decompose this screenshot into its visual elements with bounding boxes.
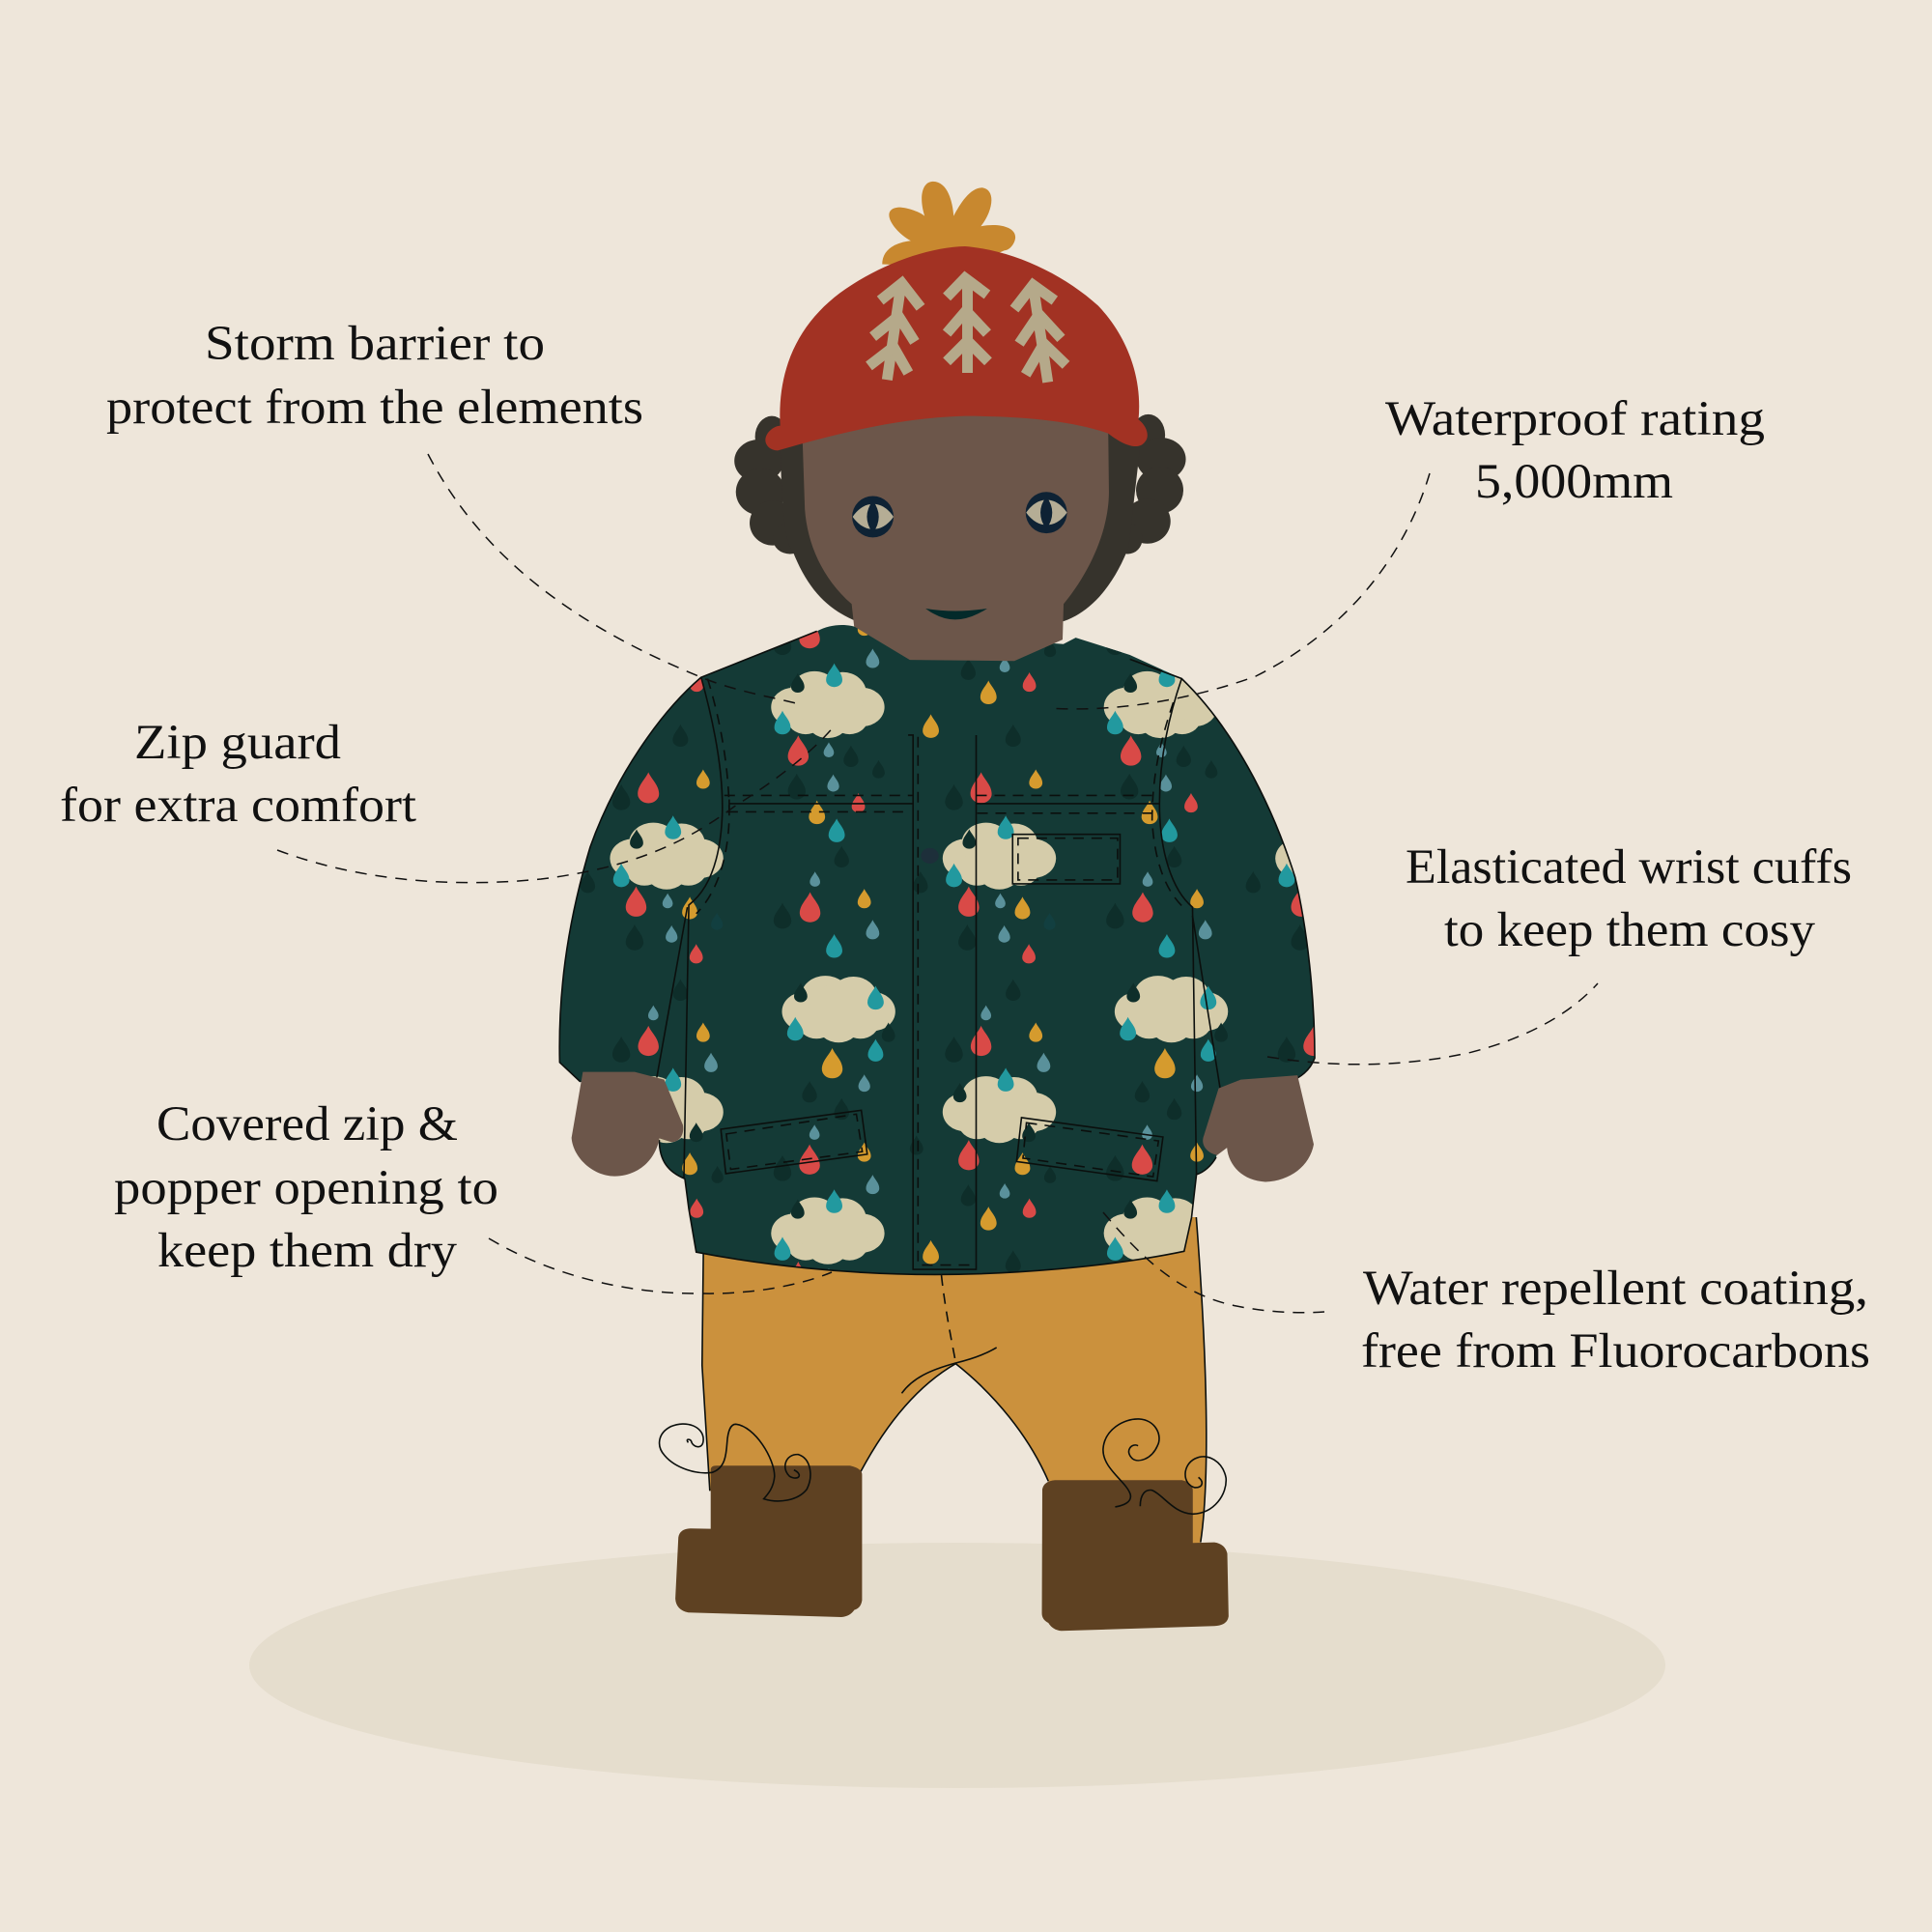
head and hat bbox=[734, 182, 1186, 661]
text: water repellent: Water repellent coating, bbox=[1363, 1262, 1868, 1316]
callout line: waterproof rating bbox=[1048, 473, 1430, 709]
mouth bbox=[925, 609, 987, 619]
text: wrist cuffs bbox=[1406, 840, 1852, 957]
hat tree motifs bbox=[868, 278, 1066, 383]
text: covered zip bbox=[114, 1097, 498, 1278]
trousers bbox=[702, 1217, 1207, 1546]
text: wrist cuffs: to keep them cosy bbox=[1444, 903, 1816, 957]
callout line: zip guard bbox=[277, 725, 835, 883]
decorative curls bbox=[660, 1419, 1226, 1514]
crotch curve bbox=[901, 1348, 997, 1393]
jacket body bbox=[559, 625, 1315, 1274]
popper button bbox=[921, 848, 939, 864]
callout line: covered zip bbox=[489, 1238, 832, 1293]
right lower pocket bbox=[1016, 1118, 1163, 1181]
face and neck bbox=[802, 406, 1109, 661]
rain and cloud print bbox=[301, 207, 1596, 1288]
right eye bbox=[1026, 492, 1067, 533]
callout line: storm barrier bbox=[428, 454, 796, 703]
hair bbox=[734, 414, 1186, 621]
right hand bbox=[1203, 1075, 1314, 1181]
text: zip guard bbox=[60, 716, 416, 833]
text: covered zip: popper opening to bbox=[114, 1161, 498, 1215]
text: water repellent: free from Fluorocarbons bbox=[1361, 1324, 1870, 1378]
callout line: wrist cuffs bbox=[1267, 983, 1598, 1065]
armhole seams bbox=[684, 677, 723, 1179]
chest pocket bbox=[1012, 835, 1120, 884]
hat bbox=[765, 246, 1148, 450]
zip placket bbox=[908, 735, 977, 1269]
text: zip guard: for extra comfort bbox=[60, 779, 416, 833]
ground shadow bbox=[249, 1543, 1665, 1788]
callout line: water repellent bbox=[1103, 1212, 1324, 1313]
text: storm barrier: protect from the elements bbox=[106, 381, 643, 435]
text: covered zip: Covered zip & bbox=[156, 1097, 458, 1151]
jacket bbox=[558, 625, 1316, 1275]
boots bbox=[675, 1465, 1229, 1631]
pompom bbox=[882, 182, 1015, 268]
text: wrist cuffs: Elasticated wrist cuffs bbox=[1406, 840, 1852, 895]
left eye bbox=[852, 497, 894, 537]
text: covered zip: keep them dry bbox=[157, 1224, 458, 1278]
text: waterproof rating: Waterproof rating bbox=[1385, 392, 1765, 446]
left lower pocket bbox=[721, 1110, 867, 1174]
text: zip guard: Zip guard bbox=[134, 716, 341, 770]
text: waterproof rating bbox=[1385, 392, 1765, 509]
garment outline bbox=[1130, 659, 1315, 1082]
text: waterproof rating: 5,000mm bbox=[1475, 455, 1673, 509]
trouser seam bbox=[942, 1275, 955, 1362]
text: water repellent bbox=[1361, 1262, 1870, 1378]
text: storm barrier: Storm barrier to bbox=[205, 317, 545, 371]
left hand bbox=[572, 1072, 683, 1177]
text: storm barrier bbox=[106, 317, 643, 435]
chest yoke seams bbox=[729, 799, 1159, 812]
